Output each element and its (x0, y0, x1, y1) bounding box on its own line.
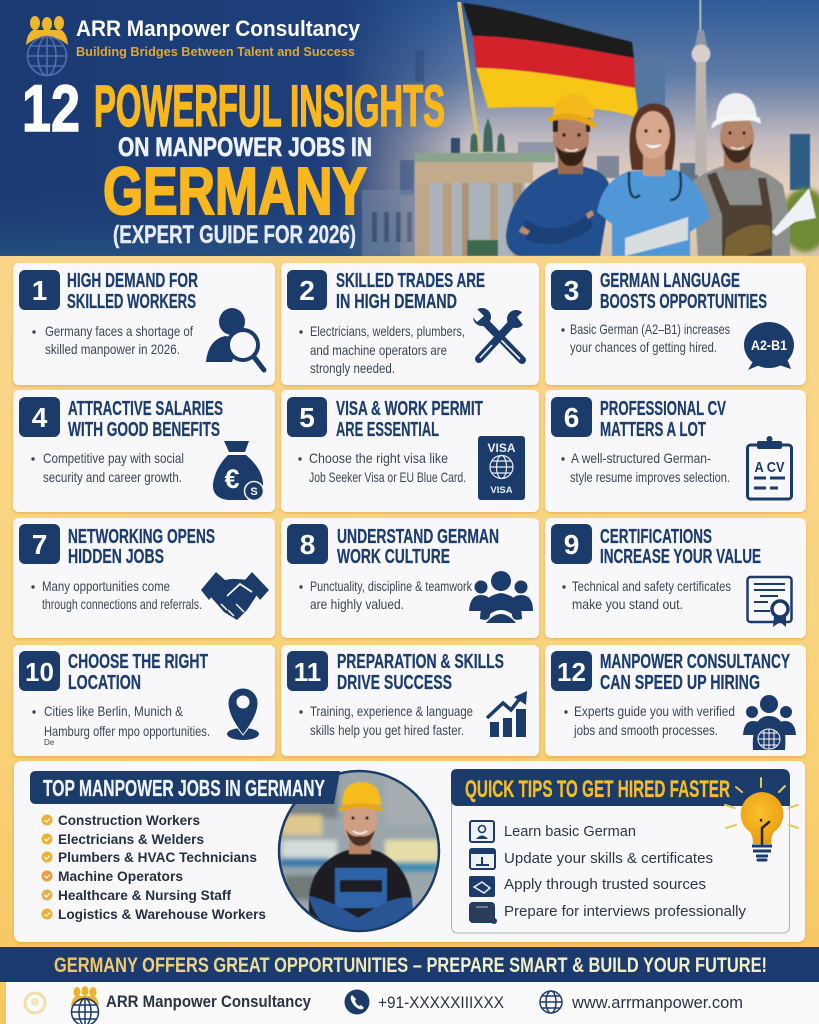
icon: speech bubble A2-B1: A2-B1 (751, 338, 787, 353)
icon: visa passport (478, 436, 525, 500)
card 1 background (13, 263, 275, 385)
card 3 text (561, 321, 730, 355)
card 6 text (561, 450, 730, 485)
card 11 number: 11 (294, 657, 321, 687)
card 10 heading (68, 651, 208, 694)
card 8 background (281, 518, 539, 638)
icon: visa passport: VISA (487, 441, 516, 455)
tip 3: Apply through trusted sources (504, 877, 706, 893)
tip 1 (470, 821, 636, 842)
card 11 background (281, 645, 539, 756)
card 11 heading: PREPARATION & SKILLS (337, 651, 504, 673)
card 6 heading: MATTERS A LOT (600, 419, 706, 441)
card 10 text (32, 703, 210, 747)
card 9 heading: CERTIFICATIONS (600, 526, 712, 548)
card 3 number (551, 270, 592, 310)
card 5 (281, 390, 539, 512)
footer company name: ARR Manpower Consultancy (106, 992, 311, 1011)
faint seal logo (25, 993, 45, 1013)
card 9 text: make you stand out. (572, 596, 683, 612)
card 7 text: through connections and referrals. (42, 596, 202, 612)
card 12 heading: CAN SPEED UP HIRING (600, 672, 760, 694)
card 10 heading: LOCATION (68, 672, 141, 694)
icon: phone (344, 990, 370, 1014)
tips outline (452, 790, 790, 933)
logo people (26, 16, 68, 45)
tip 3 (469, 876, 706, 897)
worker 3 (693, 93, 816, 256)
card 11 text: Training, experience & language (310, 703, 473, 719)
card 3 (545, 263, 806, 385)
card 6 text: A well-structured German- (571, 450, 711, 466)
card 9 text (562, 578, 731, 612)
icon: visa passport: VISA (490, 485, 513, 496)
title powerful insights: POWERFUL INSIGHTS (94, 74, 445, 139)
card 9 number: 9 (564, 529, 579, 560)
card 1 text: skilled manpower in 2026. (45, 341, 180, 357)
photo background (280, 772, 438, 912)
bottom banner (0, 947, 819, 982)
header sky (344, 0, 819, 256)
quick tips heading (451, 769, 790, 806)
card 4 heading (68, 398, 223, 441)
worker 1 (506, 94, 610, 256)
card 3 background (545, 263, 806, 385)
card 6 number: 6 (564, 402, 579, 433)
card 9 number (551, 524, 592, 564)
card 4 text: Competitive pay with social (43, 450, 184, 466)
skyline (400, 50, 810, 195)
icon: certificate (748, 577, 792, 627)
icon: team with globe (743, 695, 796, 750)
card 11 text (299, 703, 473, 738)
header logo (26, 16, 68, 76)
card 5 text: Job Seeker Visa or EU Blue Card. (309, 469, 466, 485)
quick tips box (451, 769, 798, 933)
card 6 heading: PROFESSIONAL CV (600, 398, 726, 420)
card 8 text (299, 578, 473, 612)
card 12 number (551, 651, 592, 691)
card 8 number: 8 (300, 529, 315, 560)
card 12 text: Experts guide you with verified (574, 703, 735, 719)
card 1 heading (67, 270, 198, 313)
card 5 heading: VISA & WORK PERMIT (336, 398, 483, 420)
card 11 (281, 645, 539, 756)
card 7 heading: HIDDEN JOBS (68, 546, 164, 568)
job 1: Construction Workers (58, 813, 200, 828)
card 10 heading: CHOOSE THE RIGHT (68, 651, 208, 673)
card 2 number: 2 (299, 275, 315, 306)
card 1 text: Germany faces a shortage of (45, 323, 193, 339)
card 2 text (299, 323, 465, 376)
trees (781, 188, 819, 252)
card 10 text: Cities like Berlin, Munich & (44, 703, 184, 719)
card 1 number: 1 (32, 275, 47, 306)
TV tower (692, 0, 710, 175)
icon: clipboard CV (748, 436, 792, 499)
card 5 heading: ARE ESSENTIAL (336, 419, 439, 441)
tip 2 (470, 849, 713, 869)
tip 1: Learn basic German (504, 824, 636, 840)
job 3: Plumbers & HVAC Technicians (58, 850, 257, 865)
job 4: Machine Operators (58, 869, 183, 884)
left lower tint (0, 205, 400, 256)
card 7 (13, 518, 275, 638)
card 2 text: strongly needed. (310, 360, 395, 376)
card 2 text: and machine operators are (310, 342, 447, 358)
jobs list (42, 813, 266, 922)
footer (6, 982, 819, 1024)
card 9 (545, 518, 806, 638)
card 11 number (287, 651, 328, 691)
card 5 text: Choose the right visa like (309, 450, 448, 466)
card 7 heading (68, 526, 215, 568)
card 1 text (32, 323, 193, 357)
card 4 (13, 390, 275, 512)
card 8 (281, 518, 539, 638)
card 4 number: 4 (32, 402, 48, 433)
icon: location pin (227, 688, 259, 740)
card 2 heading (336, 270, 485, 313)
card 2 background (281, 263, 539, 385)
tagline: Building Bridges Between Talent and Success (76, 44, 355, 59)
icon: clipboard CV: A CV (754, 459, 784, 476)
card 10 text: Hamburg offer mpo opportunities. (44, 723, 210, 739)
card 10 text: De (44, 738, 55, 747)
card 1 (13, 263, 275, 385)
title number 12: 12 (22, 71, 80, 145)
card 8 heading: UNDERSTAND GERMAN (337, 526, 499, 548)
phone number: +91-XXXXXIIIXXX (378, 993, 504, 1012)
German flag (463, 3, 639, 118)
card 3 heading (600, 270, 767, 313)
tip 4: Prepare for interviews professionally (504, 904, 747, 920)
icon: money bag (213, 441, 264, 500)
card 7 text (31, 578, 202, 612)
card 3 number: 3 (564, 275, 579, 306)
card 12 background (545, 645, 806, 756)
card 12 (545, 645, 806, 756)
card 5 number: 5 (299, 402, 315, 433)
footer background (6, 982, 819, 1024)
card 7 heading: NETWORKING OPENS (68, 526, 215, 548)
header banner (0, 0, 819, 256)
card 2 (281, 263, 539, 385)
card 11 heading (337, 651, 504, 694)
icon: money bag: € (224, 464, 240, 494)
top jobs heading (30, 771, 340, 804)
card 7 number (19, 524, 60, 564)
card 1 heading: HIGH DEMAND FOR (67, 270, 198, 292)
card 10 number (19, 651, 60, 691)
company name: ARR Manpower Consultancy (76, 16, 361, 41)
card 10 number: 10 (25, 657, 54, 687)
icon: globe (540, 991, 562, 1013)
card 6 text: style resume improves selection. (570, 469, 730, 485)
card 4 text: security and career growth. (43, 469, 182, 485)
job 5: Healthcare & Nursing Staff (58, 888, 232, 903)
left blue fade (0, 0, 470, 256)
icon: growth chart (487, 691, 527, 737)
card 9 text: Technical and safety certificates (572, 578, 731, 594)
Brandenburg Gate (415, 118, 555, 256)
card 9 heading (600, 526, 761, 568)
card 7 text: Many opportunities come (42, 578, 170, 594)
icon: wrench and screwdriver (468, 305, 532, 360)
card 7 number: 7 (32, 529, 47, 560)
card 1 number (19, 270, 60, 310)
card 11 heading: DRIVE SUCCESS (337, 672, 452, 694)
card 8 heading: WORK CULTURE (337, 546, 450, 568)
card 12 number: 12 (557, 657, 586, 687)
card 12 text: jobs and smooth processes. (573, 722, 718, 738)
card 3 text: your chances of getting hired. (570, 339, 717, 355)
panel: bottom section (14, 761, 805, 942)
bottom panel background (14, 761, 805, 942)
card 4 background (13, 390, 275, 512)
card 12 heading (600, 651, 790, 694)
card 8 text: Punctuality, discipline & teamwork (310, 578, 473, 594)
top jobs heading: TOP MANPOWER JOBS IN GERMANY (43, 775, 325, 801)
card 9 background (545, 518, 806, 638)
tip 4 (470, 903, 747, 924)
card 8 heading (337, 526, 499, 568)
icon: light bulb (725, 778, 798, 860)
job 2: Electricians & Welders (58, 832, 204, 847)
worker 2 nurse (597, 103, 710, 256)
icon: person with magnifier (206, 308, 264, 370)
card 7 background (13, 518, 275, 638)
card 5 number (287, 397, 327, 437)
icon: speech bubble A2-B1 (744, 322, 794, 370)
side building (362, 190, 416, 256)
worker photo circle (278, 768, 442, 936)
card 3 text: Basic German (A2–B1) increases (570, 321, 730, 337)
card 8 text: are highly valued. (310, 596, 404, 612)
card 4 heading: WITH GOOD BENEFITS (68, 419, 220, 441)
subtitle: (EXPERT GUIDE FOR 2026) (113, 221, 356, 249)
tip 2: Update your skills & certificates (504, 851, 713, 867)
card 5 background (281, 390, 539, 512)
card 2 heading: SKILLED TRADES ARE (336, 270, 485, 292)
title Germany: GERMANY (103, 154, 367, 229)
footer logo (71, 986, 99, 1024)
card 6 number (551, 397, 592, 437)
card 2 number (287, 270, 327, 310)
flag pole (457, 2, 481, 152)
card 11 text: skills help you get hired faster. (310, 722, 464, 738)
card 12 text (564, 703, 735, 738)
card 3 heading: GERMAN LANGUAGE (600, 270, 740, 292)
icon: team (469, 571, 533, 623)
card 5 heading (336, 398, 483, 441)
card 6 heading (600, 398, 726, 441)
card 5 text (298, 450, 466, 485)
card 4 number (19, 397, 60, 437)
icon: handshake (201, 572, 269, 620)
website: www.arrmanpower.com (571, 993, 743, 1012)
card 1 heading: SKILLED WORKERS (67, 291, 196, 313)
icon: money bag: S (250, 486, 258, 498)
card 10 background (13, 645, 275, 756)
card 2 heading: IN HIGH DEMAND (336, 291, 457, 313)
logo globe (28, 36, 66, 76)
card 6 (545, 390, 806, 512)
title line 2: ON MANPOWER JOBS IN (118, 132, 372, 162)
card 10 (13, 645, 275, 756)
card 4 text (31, 450, 184, 485)
card 8 number (287, 524, 328, 564)
card 6 background (545, 390, 806, 512)
worker body (309, 782, 414, 936)
card 2 text: Electricians, welders, plumbers, (310, 323, 465, 339)
card 4 heading: ATTRACTIVE SALARIES (68, 398, 223, 420)
job 6: Logistics & Warehouse Workers (58, 907, 266, 922)
